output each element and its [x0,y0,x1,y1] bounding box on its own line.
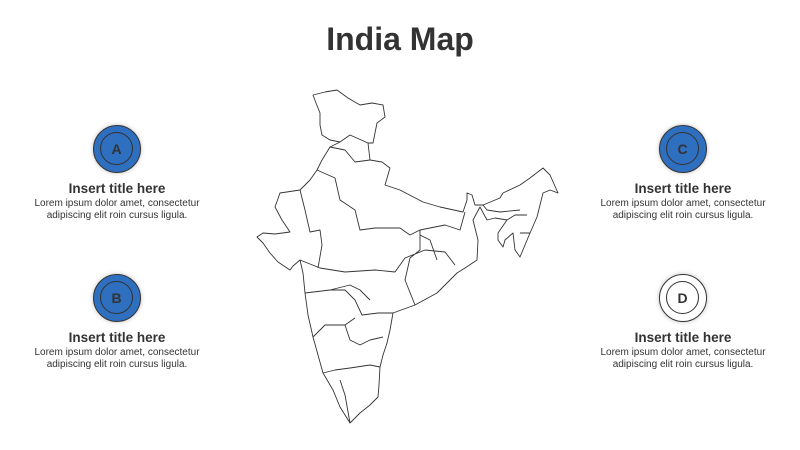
item C: Insert title here [635,181,731,196]
item A: A [111,140,122,156]
item B: Lorem ipsum dolor amet, consectetur [34,347,200,358]
item D: D [677,290,688,306]
item B [34,272,200,370]
item C: Lorem ipsum dolor amet, consectetur [600,198,766,209]
item B: B [111,290,122,306]
item A: Lorem ipsum dolor amet, consectetur [34,198,200,209]
item D: Insert title here [635,330,731,345]
item B: adipiscing elit roin cursus ligula. [47,359,187,370]
item A [34,122,200,221]
item A: adipiscing elit roin cursus ligula. [47,210,187,221]
item C: adipiscing elit roin cursus ligula. [613,210,753,221]
item D [600,272,766,370]
item D: Lorem ipsum dolor amet, consectetur [600,347,766,358]
item B: Insert title here [69,330,165,345]
item C [600,122,766,221]
title: India Map [326,21,474,57]
item A: Insert title here [69,181,165,196]
item C: C [677,140,688,156]
item D: adipiscing elit roin cursus ligula. [613,359,753,370]
